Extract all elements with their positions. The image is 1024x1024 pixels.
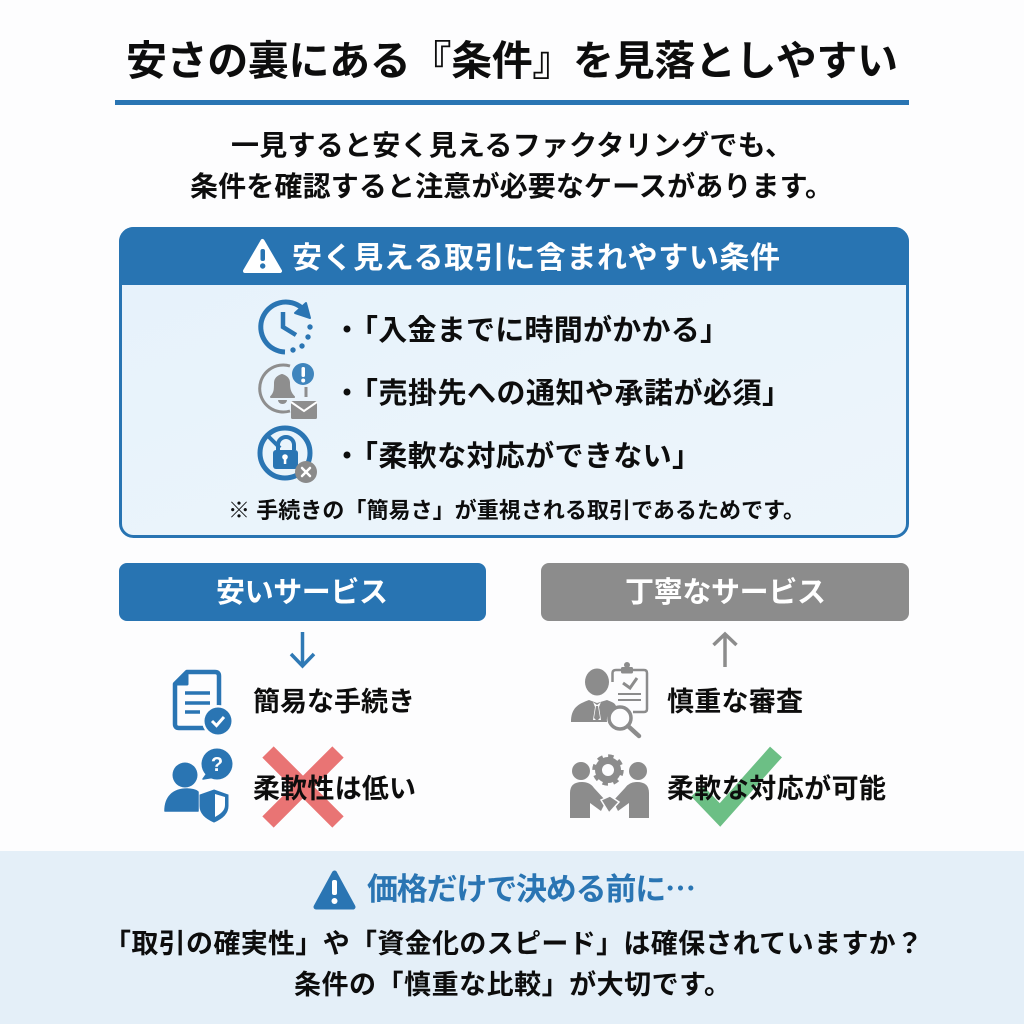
button: cheap service: 安いサービス xyxy=(216,576,388,609)
row: careful screening: 慎重な審査 xyxy=(667,687,803,717)
icon: handshake and gear xyxy=(570,756,649,818)
condition list: 「入金までに時間がかかる」 xyxy=(349,313,729,347)
note: ※ 手続きの「簡易さ」が重視される取引であるためです。 xyxy=(228,498,805,523)
callout heading: 価格だけで決める前に… xyxy=(367,864,696,909)
arrow: up xyxy=(714,634,736,667)
callout text: 条件の「慎重な比較」が大切です。 xyxy=(294,969,731,1000)
title xyxy=(115,38,909,105)
panel header xyxy=(119,227,909,285)
panel: conditions xyxy=(119,227,909,536)
intro text: 条件を確認すると注意が必要なケースがあります。 xyxy=(190,170,833,202)
icon: warning xyxy=(316,873,353,907)
panel: bottom callout xyxy=(0,851,1024,1024)
condition list: 「柔軟な対応ができない」 xyxy=(349,439,701,473)
button: careful service xyxy=(541,563,909,621)
arrow: down xyxy=(291,632,314,666)
icon: crossed lock xyxy=(260,428,317,483)
icon: person, question and shield xyxy=(165,748,232,822)
icon: warning xyxy=(245,241,280,271)
button: careful service: 丁寧なサービス xyxy=(625,576,826,609)
row: low flexibility with cross: 柔軟性は低い xyxy=(253,774,416,804)
callout text xyxy=(104,929,923,1000)
row: flexible response with check xyxy=(667,752,886,815)
panel header: 安く見える取引に含まれやすい条件 xyxy=(292,242,780,275)
condition list: 「売掛先への通知や承諾が必須」 xyxy=(349,376,791,410)
title: 安さの裏にある『条件』を見落としやすい xyxy=(126,38,898,84)
intro text: 一見すると安く見えるファクタリングでも、 xyxy=(231,129,793,161)
button: cheap service xyxy=(119,563,486,621)
icon: examiner xyxy=(571,662,647,736)
icon: clock xyxy=(261,302,313,353)
callout text: 「取引の確実性」や「資金化のスピード」は確保されていますか？ xyxy=(104,929,923,959)
icon: person, question and shield: ? xyxy=(211,754,223,776)
condition list xyxy=(344,313,791,473)
intro text xyxy=(190,129,833,202)
icon: document check xyxy=(175,672,234,737)
icon: bell and mail xyxy=(260,363,317,419)
row: flexible response with check: 柔軟な対応が可能 xyxy=(667,773,886,804)
row: low flexibility with cross xyxy=(253,752,416,822)
row: easy procedure: 簡易な手続き xyxy=(253,687,415,717)
